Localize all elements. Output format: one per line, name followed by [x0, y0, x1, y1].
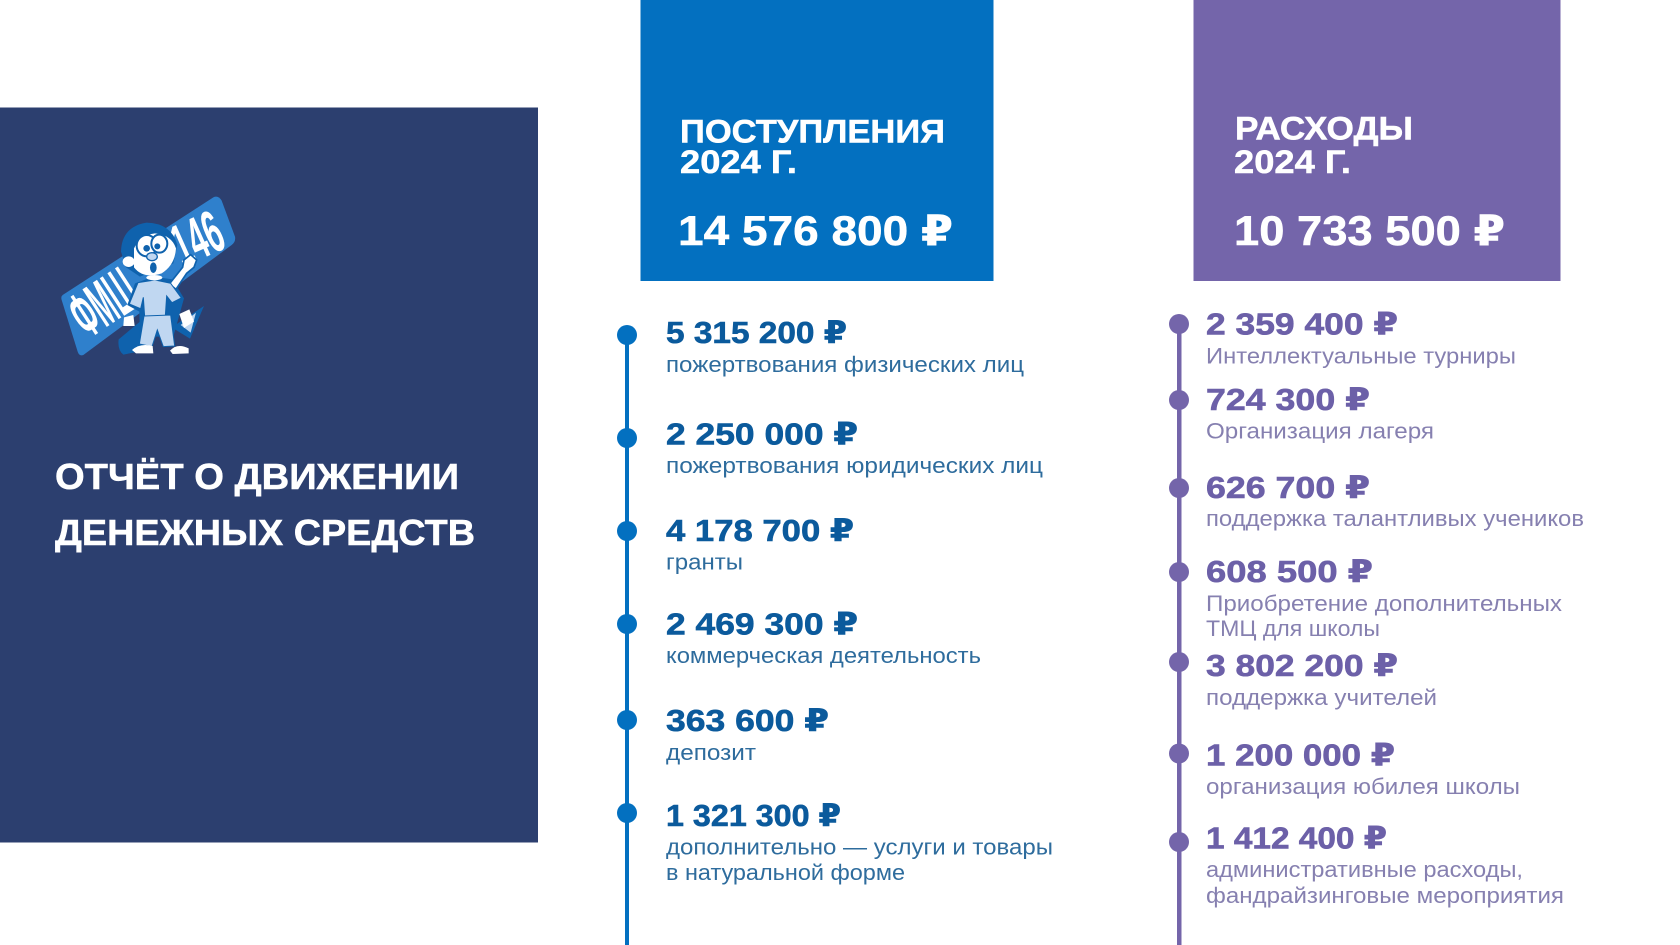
income item 2: [617, 416, 1043, 478]
expense item 6: организация юбилея школы: [1206, 774, 1520, 799]
panel: expenses header: 10 733 500 ₽: [1234, 207, 1505, 254]
expense item 4: 608 500 ₽: [1206, 554, 1373, 589]
income item 6: [617, 798, 1053, 885]
expense item 5: [1169, 648, 1437, 710]
timeline: income: [617, 315, 1053, 945]
expense item 7: фандрайзинговые мероприятия: [1206, 883, 1564, 908]
panel: expenses header: 2024 Г.: [1234, 144, 1351, 180]
income item 3: [617, 513, 854, 574]
income item 5: [617, 703, 829, 765]
icon: school logo: ФМШ: [56, 254, 151, 351]
expense item 1: 2 359 400 ₽: [1206, 306, 1398, 342]
income item 4: коммерческая деятельность: [666, 643, 981, 668]
expense item 4: [1169, 554, 1563, 641]
income item 1: пожертвования физических лиц: [666, 352, 1024, 377]
expense item 4: Приобретение дополнительных: [1206, 591, 1563, 616]
expense item 4: ТМЦ для школы: [1206, 616, 1380, 641]
expense item 3: [1169, 470, 1584, 531]
panel: income header: [640, 0, 994, 281]
income item 6: 1 321 300 ₽: [666, 798, 841, 833]
panel: income header: ПОСТУПЛЕНИЯ: [680, 114, 945, 150]
income item 6: дополнительно — услуги и товары: [666, 834, 1053, 860]
expense item 5: поддержка учителей: [1206, 685, 1437, 710]
expense item 7: [1169, 820, 1564, 908]
expense item 3: поддержка талантливых учеников: [1206, 506, 1584, 531]
expense item 1: [1169, 306, 1516, 368]
expense item 7: 1 412 400 ₽: [1206, 820, 1387, 856]
income item 1: 5 315 200 ₽: [666, 315, 847, 350]
income item 2: пожертвования юридических лиц: [666, 453, 1043, 478]
expense item 3: 626 700 ₽: [1206, 470, 1370, 505]
expense item 2: Организация лагеря: [1206, 418, 1434, 444]
expense item 1: Интеллектуальные турниры: [1206, 344, 1516, 368]
income item 4: 2 469 300 ₽: [666, 606, 858, 642]
panel: expenses header: [1194, 0, 1560, 281]
heading: report title: [55, 456, 475, 553]
heading: report title: ДЕНЕЖНЫХ СРЕДСТВ: [55, 512, 475, 553]
icon: school logo: 146: [161, 198, 234, 279]
income item 6: в натуральной форме: [666, 860, 905, 885]
expense item 6: 1 200 000 ₽: [1206, 738, 1395, 772]
panel: income header: 14 576 800 ₽: [678, 207, 953, 254]
income item 3: 4 178 700 ₽: [666, 513, 854, 548]
income item 3: гранты: [666, 550, 743, 574]
panel: income header: 2024 Г.: [680, 144, 797, 180]
expense item 5: 3 802 200 ₽: [1206, 648, 1398, 683]
panel: expenses header: РАСХОДЫ: [1235, 110, 1413, 146]
income item 5: депозит: [666, 740, 756, 765]
expense item 6: [1169, 738, 1520, 799]
expense item 2: [1169, 382, 1434, 444]
heading: report title: ОТЧЁТ О ДВИЖЕНИИ: [55, 456, 459, 497]
timeline: expenses: [1169, 306, 1584, 945]
income item 5: 363 600 ₽: [666, 703, 829, 738]
expense item 2: 724 300 ₽: [1206, 382, 1370, 417]
expense item 7: административные расходы,: [1206, 857, 1523, 882]
income item 1: [617, 315, 1024, 377]
income item 4: [617, 606, 981, 668]
panel: title: [0, 108, 538, 842]
income item 2: 2 250 000 ₽: [666, 416, 858, 452]
